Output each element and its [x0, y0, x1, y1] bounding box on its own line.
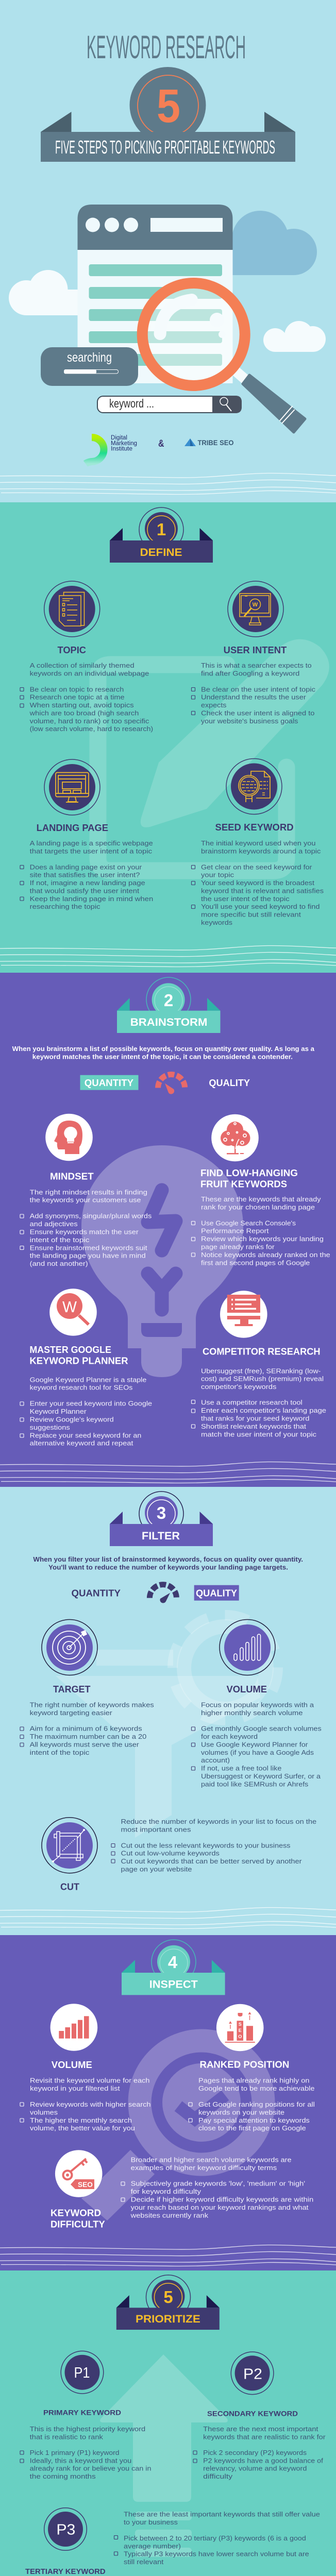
logo: Digital Marketing Institute: Institute [111, 446, 132, 452]
text: competitor research: Ubersuggest (free), SERanking (low- [201, 1367, 321, 1375]
text: keyword difficulty: Decide if higher keyword difficulty keywords are within [131, 2196, 313, 2203]
text: target: The maximum number can be a 20 [30, 1733, 146, 1740]
text: cut: Cut out the less relevant keywords to your business [121, 1841, 291, 1849]
heading: cut: CUT [60, 1882, 79, 1892]
text: volume: paid tool like SEMRush or Ahrefs [201, 1781, 309, 1788]
text: keyword difficulty: your reach based on your keyword rankings and what [131, 2204, 309, 2211]
heading: competitor research: COMPETITOR RESEARCH [203, 1346, 321, 1357]
text: user intent: expects [201, 701, 227, 709]
text: volume: volumes [30, 2108, 58, 2116]
heading: keyword difficulty [51, 2208, 105, 2229]
step 4 ribbon: inspect [122, 1940, 225, 1995]
text: topic: volume, hard to rank) or too specific [30, 717, 149, 725]
text: volume: If not, use a free tool like [201, 1765, 281, 1772]
logo: Digital Marketing Institute: Marketing [111, 440, 137, 447]
icon: crop tool [42, 1818, 97, 1873]
heading: find low-hanging fruit keywords: FRUIT KEYWORDS [200, 1179, 287, 1190]
text: mindset: Ensure keywords match the user [30, 1228, 139, 1235]
text: landing page: that would satisfy the user intent [30, 887, 140, 894]
wave divider [0, 945, 336, 967]
text: mindset: Add synonyms, singular/plural words [30, 1212, 152, 1220]
text: volume: Focus on popular keywords with a [201, 1701, 314, 1709]
text: keyword difficulty: Subjectively grade keywords 'low', 'medium' or 'high' [131, 2180, 305, 2188]
text: cut: Cut out keywords that can be better served by another [121, 1857, 302, 1865]
text: cut [111, 1818, 316, 1873]
heading: master google keyword planner: KEYWORD PLANNER [29, 1356, 128, 1366]
logo: Tribe SEO: TRIBE SEO [198, 438, 234, 447]
text: brainstorm intro: keyword matches the user intent of the topic, it can be considered a contender. [32, 1053, 293, 1060]
text: topic: Be clear on topic to research [30, 685, 124, 693]
searching badge: searching [67, 350, 112, 365]
browser window [77, 205, 233, 383]
text: fruit keywords [192, 1195, 330, 1266]
icon: monitor with list [220, 1291, 267, 1338]
text: ranked position [189, 2077, 315, 2132]
text: filter intro: When you filter your list of brainstormed keywords, focus on quality over quantity. [33, 1555, 303, 1563]
text: seed keyword [192, 839, 324, 926]
search bar [97, 396, 242, 413]
text: target: intent of the topic [30, 1749, 90, 1756]
step 2 ribbon: brainstorm: 2 [164, 991, 173, 1010]
text: volume: higher monthly search volume [201, 1709, 303, 1717]
text: google keyword planner: Google Keyword Planner is a staple [30, 1376, 146, 1383]
text: brainstorm intro: When you brainstorm a list of possible keywords, focus on quantity over quality. As long as a [12, 1045, 315, 1053]
panel: competitor research [192, 1291, 326, 1438]
icon: target with arrow [42, 1620, 97, 1675]
icon: key with SEO tag: SEO [78, 2180, 93, 2189]
text: seed keyword: You'll use your seed keyword to find [201, 903, 320, 910]
panel: volume (inspect) [20, 2004, 150, 2132]
heading: master google keyword planner [29, 1345, 128, 1366]
text: user intent [192, 662, 316, 725]
heading: master google keyword planner: MASTER GOOGLE [29, 1345, 111, 1355]
heading: user intent: USER INTENT [224, 645, 287, 655]
text: ranked position: Get Google ranking positions for all [198, 2100, 315, 2108]
icon: document under magnifier [226, 758, 282, 814]
text: google keyword planner: keyword research tool for SEOs [30, 1384, 133, 1392]
text: competitor research: cost) and SEMRush (premium) reveal [201, 1375, 324, 1383]
wave divider [0, 473, 336, 495]
text: seed keyword: the user intent of the topic [201, 895, 290, 903]
panel: cut [42, 1818, 316, 1892]
text: topic: which are too broad (high search [29, 709, 139, 717]
text: volume [192, 1701, 322, 1788]
step 5 ribbon: prioritize: PRIORITIZE [136, 2313, 200, 2325]
text: competitor research: Shortlist relevant keywords that [201, 1422, 306, 1430]
icon: monitor with magnifier [228, 581, 283, 637]
text: topic: Research one topic at a time [30, 693, 125, 701]
text: google keyword planner: suggestions [30, 1423, 70, 1431]
heading: volume: VOLUME [52, 2060, 92, 2070]
text: fruit keywords: Notice keywords already ranked on the [201, 1251, 330, 1259]
text: fruit keywords: page already ranks for [201, 1243, 275, 1251]
text: landing page: Does a landing page exist on your [30, 863, 142, 871]
heading: keyword difficulty: DIFFICULTY [51, 2219, 105, 2229]
text: keyword difficulty: for keyword difficulty [131, 2188, 201, 2195]
text: primary keyword [20, 2425, 152, 2480]
icon: P3 badge: P3 [56, 2521, 75, 2538]
text: tertiary keyword: These are the least important keywords that still offer value [124, 2511, 320, 2518]
text: tertiary keyword: Pick between 2 to 20 tertiary (P3) keywords (6 is a good [124, 2534, 306, 2542]
text: seed keyword: The initial keyword used when you [201, 839, 315, 847]
icon: signal bars [220, 1620, 275, 1675]
icon: SEO podium: O [238, 2034, 242, 2039]
icon: fruit tree [211, 1114, 259, 1161]
text: target: Aim for a minimum of 6 keywords [30, 1725, 142, 1733]
searching badge [41, 347, 138, 386]
text: ranked position: keywords on your website [198, 2108, 284, 2116]
text: keyword difficulty: Broader and higher search volume keywords are [131, 2156, 292, 2164]
heading: seed keyword: SEED KEYWORD [215, 822, 294, 833]
panel: ranked position [189, 2004, 315, 2132]
text: secondary keyword [193, 2425, 326, 2480]
step 5 ribbon: prioritize: 5 [163, 2287, 173, 2307]
gauge: quantity over quality: QUANTITY [85, 1078, 133, 1088]
text: competitor research: that ranks for your seed keyword [201, 1415, 309, 1422]
text: target: keyword targeting easier [30, 1709, 112, 1717]
text: cut: page on your website [121, 1865, 192, 1873]
text: topic [20, 662, 153, 733]
panel: topic [20, 581, 153, 733]
icon: P2 badge [231, 2352, 274, 2395]
icon: SEO podium [216, 2004, 264, 2051]
step 1 ribbon: define: 1 [157, 520, 166, 539]
heading: secondary keyword: SECONDARY KEYWORD [207, 2410, 298, 2417]
cloud: white right [263, 321, 326, 352]
text: topic: When starting out, avoid topics [30, 701, 134, 709]
icon: P1 badge: P1 [74, 2365, 90, 2381]
heading: find low-hanging fruit keywords: FIND LOW-HANGING [200, 1168, 298, 1178]
watermark: edit icon [98, 639, 329, 871]
heading: mindset: MINDSET [50, 1171, 94, 1181]
text: competitor research: match the user intent of your topic [201, 1430, 317, 1438]
text: keyword difficulty: websites currently rank [130, 2211, 209, 2219]
text: seed keyword: keyword that is relevant and satisfies [201, 887, 324, 894]
text: landing page [20, 839, 153, 910]
text: landing page: Keep the landing page in mind when [30, 895, 153, 903]
text: fruit keywords: These are the keywords that already [201, 1195, 321, 1203]
step 3 ribbon: filter: 3 [157, 1503, 166, 1522]
step 4 ribbon: inspect: INSPECT [149, 1978, 198, 1991]
icon: W magnifier: W [62, 1298, 77, 1316]
text: topic: A collection of similarly themed [30, 662, 135, 669]
watermark: magnifier with check [81, 2041, 263, 2221]
watermark: filter and gear [56, 1615, 278, 1838]
text: filter intro: You'll want to reduce the number of keywords your landing page targets. [48, 1564, 288, 1571]
text: mindset [20, 1188, 152, 1267]
text: seed keyword: keywords [201, 919, 233, 926]
text: user intent: your website's business goals [201, 717, 298, 725]
text: user intent: Check the user intent is aligned to [201, 709, 314, 717]
gauge: quality over quantity: QUANTITY [71, 1588, 121, 1598]
text: primary keyword: Ideally, this a keyword that you [30, 2456, 131, 2464]
text: target [20, 1701, 154, 1756]
text: primary keyword: This is the highest priority keyword [30, 2425, 145, 2433]
gauge: quantity over quality [80, 1075, 250, 1094]
text: brainstorm intro [12, 1045, 315, 1060]
text: volume: account) [201, 1756, 230, 1764]
text: volume [20, 2077, 150, 2132]
text: volume: Ubersuggest or Keyword Surfer, or a [201, 1772, 321, 1780]
text: keyword difficulty [121, 2156, 313, 2219]
text: volume: Review keywords with higher search [30, 2100, 150, 2108]
heading: keyword difficulty: KEYWORD [51, 2208, 101, 2218]
heading: target: TARGET [53, 1684, 91, 1694]
header ribbon: five steps [41, 67, 295, 162]
text: seed keyword: your topic [201, 871, 234, 879]
text: volume: The higher the monthly search [30, 2116, 132, 2124]
text: ranked position: close to the first page on Google [198, 2124, 306, 2132]
text: competitor research: competitor's keywords [201, 1383, 277, 1391]
text: secondary keyword: Pick 2 secondary (P2) keywords [203, 2449, 307, 2456]
text: mindset: Ensure brainstormed keywords suit [30, 1244, 147, 1251]
wave divider [0, 2245, 336, 2266]
heading: primary keyword: PRIMARY KEYWORD [43, 2409, 121, 2417]
text: landing page: researching the topic [30, 903, 100, 910]
icon: SEO podium: E [239, 2028, 242, 2033]
logo: Digital Marketing Institute [86, 435, 137, 464]
icon: P1 badge [61, 2351, 104, 2394]
text: tertiary keyword: average number) [124, 2542, 181, 2550]
text: volume: Use Google Keyword Planner for [201, 1740, 308, 1749]
heading: topic: TOPIC [58, 645, 86, 655]
text: topic: keywords on an individual webpage [30, 669, 149, 677]
magnifying glass [142, 283, 305, 432]
search bar: keyword ... [109, 397, 154, 410]
text: google keyword planner: Keyword Planner [30, 1408, 87, 1415]
text: volume: volumes (if you have a Google Ads [201, 1749, 314, 1756]
text: competitor research: Use a competitor research tool [201, 1399, 303, 1406]
text: fruit keywords: Performance Report [201, 1227, 269, 1235]
text: primary keyword: that is realistic to rank [30, 2433, 103, 2441]
heading: landing page: LANDING PAGE [37, 823, 108, 833]
text: primary keyword: Pick 1 primary (P1) keyword [30, 2449, 120, 2456]
text: primary keyword: already rank for or believe you can in [30, 2465, 152, 2472]
icon: P2 badge: P2 [243, 2366, 262, 2382]
step 3 ribbon: filter [110, 1492, 213, 1546]
text: mindset: intent of the topic [30, 1236, 90, 1244]
icon: P3 badge [44, 2508, 87, 2550]
text: secondary keyword: keywords that are realistic to rank for [203, 2433, 326, 2441]
icon: documents [44, 581, 100, 637]
panel: mindset [20, 1114, 152, 1267]
step 4 ribbon: inspect: 4 [168, 1953, 178, 1972]
text: tertiary keyword [114, 2511, 320, 2566]
text: cut: Cut out low-volume keywords [121, 1850, 220, 1857]
text: fruit keywords: first and second pages of Google [201, 1259, 310, 1266]
text: user intent: Be clear on the user intent of topic [201, 685, 316, 693]
text: user intent: This is what a searcher expects to [201, 662, 312, 669]
text: primary keyword: the coming months [30, 2472, 96, 2480]
gauge: quantity over quality: QUALITY [209, 1078, 250, 1088]
panel: volume (filter) [192, 1620, 322, 1788]
watermark: up arrow [100, 2354, 228, 2557]
wave divider [0, 1907, 336, 1929]
text: secondary keyword: P2 keywords have a good balance of [203, 2456, 323, 2464]
step 1 ribbon: define [110, 507, 213, 563]
cloud: white left [9, 270, 80, 315]
text: fruit keywords: Use Google Search Console's [201, 1219, 296, 1227]
text: google keyword planner: Replace your seed keyword for an [30, 1431, 141, 1439]
step 2 ribbon: brainstorm: BRAINSTORM [130, 1016, 207, 1028]
watermark: light bulb [81, 1145, 243, 1377]
header ribbon: five steps: 5 [157, 80, 180, 132]
text: mindset: The right mindset results in finding [30, 1188, 147, 1196]
text: landing page: that targets the user intent of a topic [30, 847, 153, 855]
icon: bar chart [51, 2004, 97, 2051]
text: secondary keyword: difficulty [203, 2472, 233, 2480]
text: seed keyword: Your seed keyword is the broadest [201, 879, 314, 887]
text: landing page: If not, imagine a new landing page [30, 879, 145, 887]
text: google keyword planner [20, 1376, 152, 1447]
icon: SEO podium: S [239, 2022, 242, 2027]
icon: W magnifier [49, 1289, 97, 1336]
ampersand: & [158, 438, 164, 449]
text: mindset: and adjectives [30, 1220, 78, 1228]
text: fruit keywords: Review which keywords your landing [201, 1235, 324, 1243]
icon: head with light bulb [45, 1114, 93, 1161]
text: mindset: the landing page you have in mind [30, 1252, 146, 1260]
text: competitor research: Enter each competitor's landing page [201, 1406, 326, 1414]
hero illustration: browser, clouds and magnifier [9, 205, 326, 432]
heading: volume: VOLUME [227, 1684, 267, 1694]
text: volume: volume, the better value for you [30, 2124, 135, 2132]
text: landing page: A landing page is a specific webpage [30, 839, 153, 847]
text: seed keyword: brainstorm keywords around a topic [201, 847, 321, 855]
text: mindset: the keywords your customers use [30, 1196, 141, 1204]
text: filter intro [33, 1555, 303, 1571]
text: ranked position: Pages that already rank highly on [198, 2077, 309, 2084]
panel: user intent [192, 581, 316, 725]
panel: find low-hanging fruit keywords [192, 1114, 330, 1266]
text: seed keyword: Get clear on the seed keyword for [201, 863, 312, 871]
step 1 ribbon: define: DEFINE [140, 547, 182, 558]
text: secondary keyword: These are the next most important [203, 2425, 318, 2433]
text: landing page: site that satisfies the user intent? [30, 871, 140, 879]
text: target: The right number of keywords makes [30, 1701, 154, 1709]
text: fruit keywords: rank for your chosen landing page [201, 1203, 315, 1211]
wave divider [0, 1462, 336, 1483]
icon: key with SEO tag [55, 2150, 102, 2197]
text: user intent: Understand the results the user [201, 693, 306, 701]
panel: landing page [20, 759, 153, 910]
text: user intent: find after Googling a keyword [201, 669, 299, 677]
panel: tertiary keyword [25, 2508, 320, 2576]
text: seed keyword: more specific but still relevant [201, 911, 301, 919]
cloud: blue [227, 211, 317, 275]
panel: keyword difficulty [51, 2150, 313, 2229]
gauge: quality over quantity [71, 1585, 239, 1603]
panel: secondary keyword [193, 2352, 326, 2480]
text: keyword difficulty: examples of higher keyword difficulty terms [131, 2164, 277, 2172]
text: volume: Get monthly Google search volumes [201, 1725, 322, 1733]
text: tertiary keyword: still relevant [124, 2558, 164, 2566]
icon: landing page monitor [44, 759, 100, 815]
gauge: quality over quantity: QUALITY [196, 1588, 237, 1598]
text: cut: Reduce the number of keywords in your list to focus on the [121, 1818, 316, 1825]
logo: Tribe SEO [184, 438, 234, 447]
text: google keyword planner: alternative keyword and repeat [30, 1439, 133, 1447]
text: topic: (low search volume, hard to research) [30, 725, 153, 733]
step 5 ribbon: prioritize [116, 2275, 220, 2330]
heading: ranked position: RANKED POSITION [200, 2059, 289, 2070]
icon: monitor with magnifier: W [253, 602, 258, 608]
logo: Digital Marketing Institute: Digital [111, 435, 127, 441]
text: cut: most important ones [121, 1825, 191, 1833]
text: mindset: (and not another) [30, 1260, 88, 1267]
panel: seed keyword [192, 758, 324, 926]
text: volume: keyword in your filtered list [30, 2084, 120, 2092]
text: google keyword planner: Enter your seed keyword into Google [30, 1400, 152, 1408]
text: secondary keyword: relevancy, volume and keyword [203, 2465, 307, 2472]
text: ranked position: Pay special attention to keywords [198, 2116, 310, 2124]
text: tertiary keyword: to your business [124, 2518, 178, 2526]
text: competitor research [192, 1367, 326, 1438]
text: ranked position: Google tend to be more achievable [198, 2084, 314, 2092]
text: volume: Revisit the keyword volume for each [30, 2077, 149, 2084]
heading: tertiary keyword: TERTIARY KEYWORD [25, 2568, 106, 2576]
text: tertiary keyword: Typically P3 keywords have lower search volume but are [124, 2550, 309, 2558]
step 2 ribbon: brainstorm [117, 977, 221, 1033]
text: google keyword planner: Review Google's keyword [30, 1416, 114, 1423]
text: volume: for each keyword [201, 1733, 258, 1740]
step 3 ribbon: filter: FILTER [142, 1530, 180, 1542]
text: target: All keywords must serve the user [30, 1740, 139, 1749]
heading: find low-hanging fruit keywords [200, 1168, 298, 1190]
panel: target [20, 1620, 154, 1756]
panel: primary keyword [20, 2351, 152, 2480]
panel: master google keyword planner [20, 1289, 152, 1447]
